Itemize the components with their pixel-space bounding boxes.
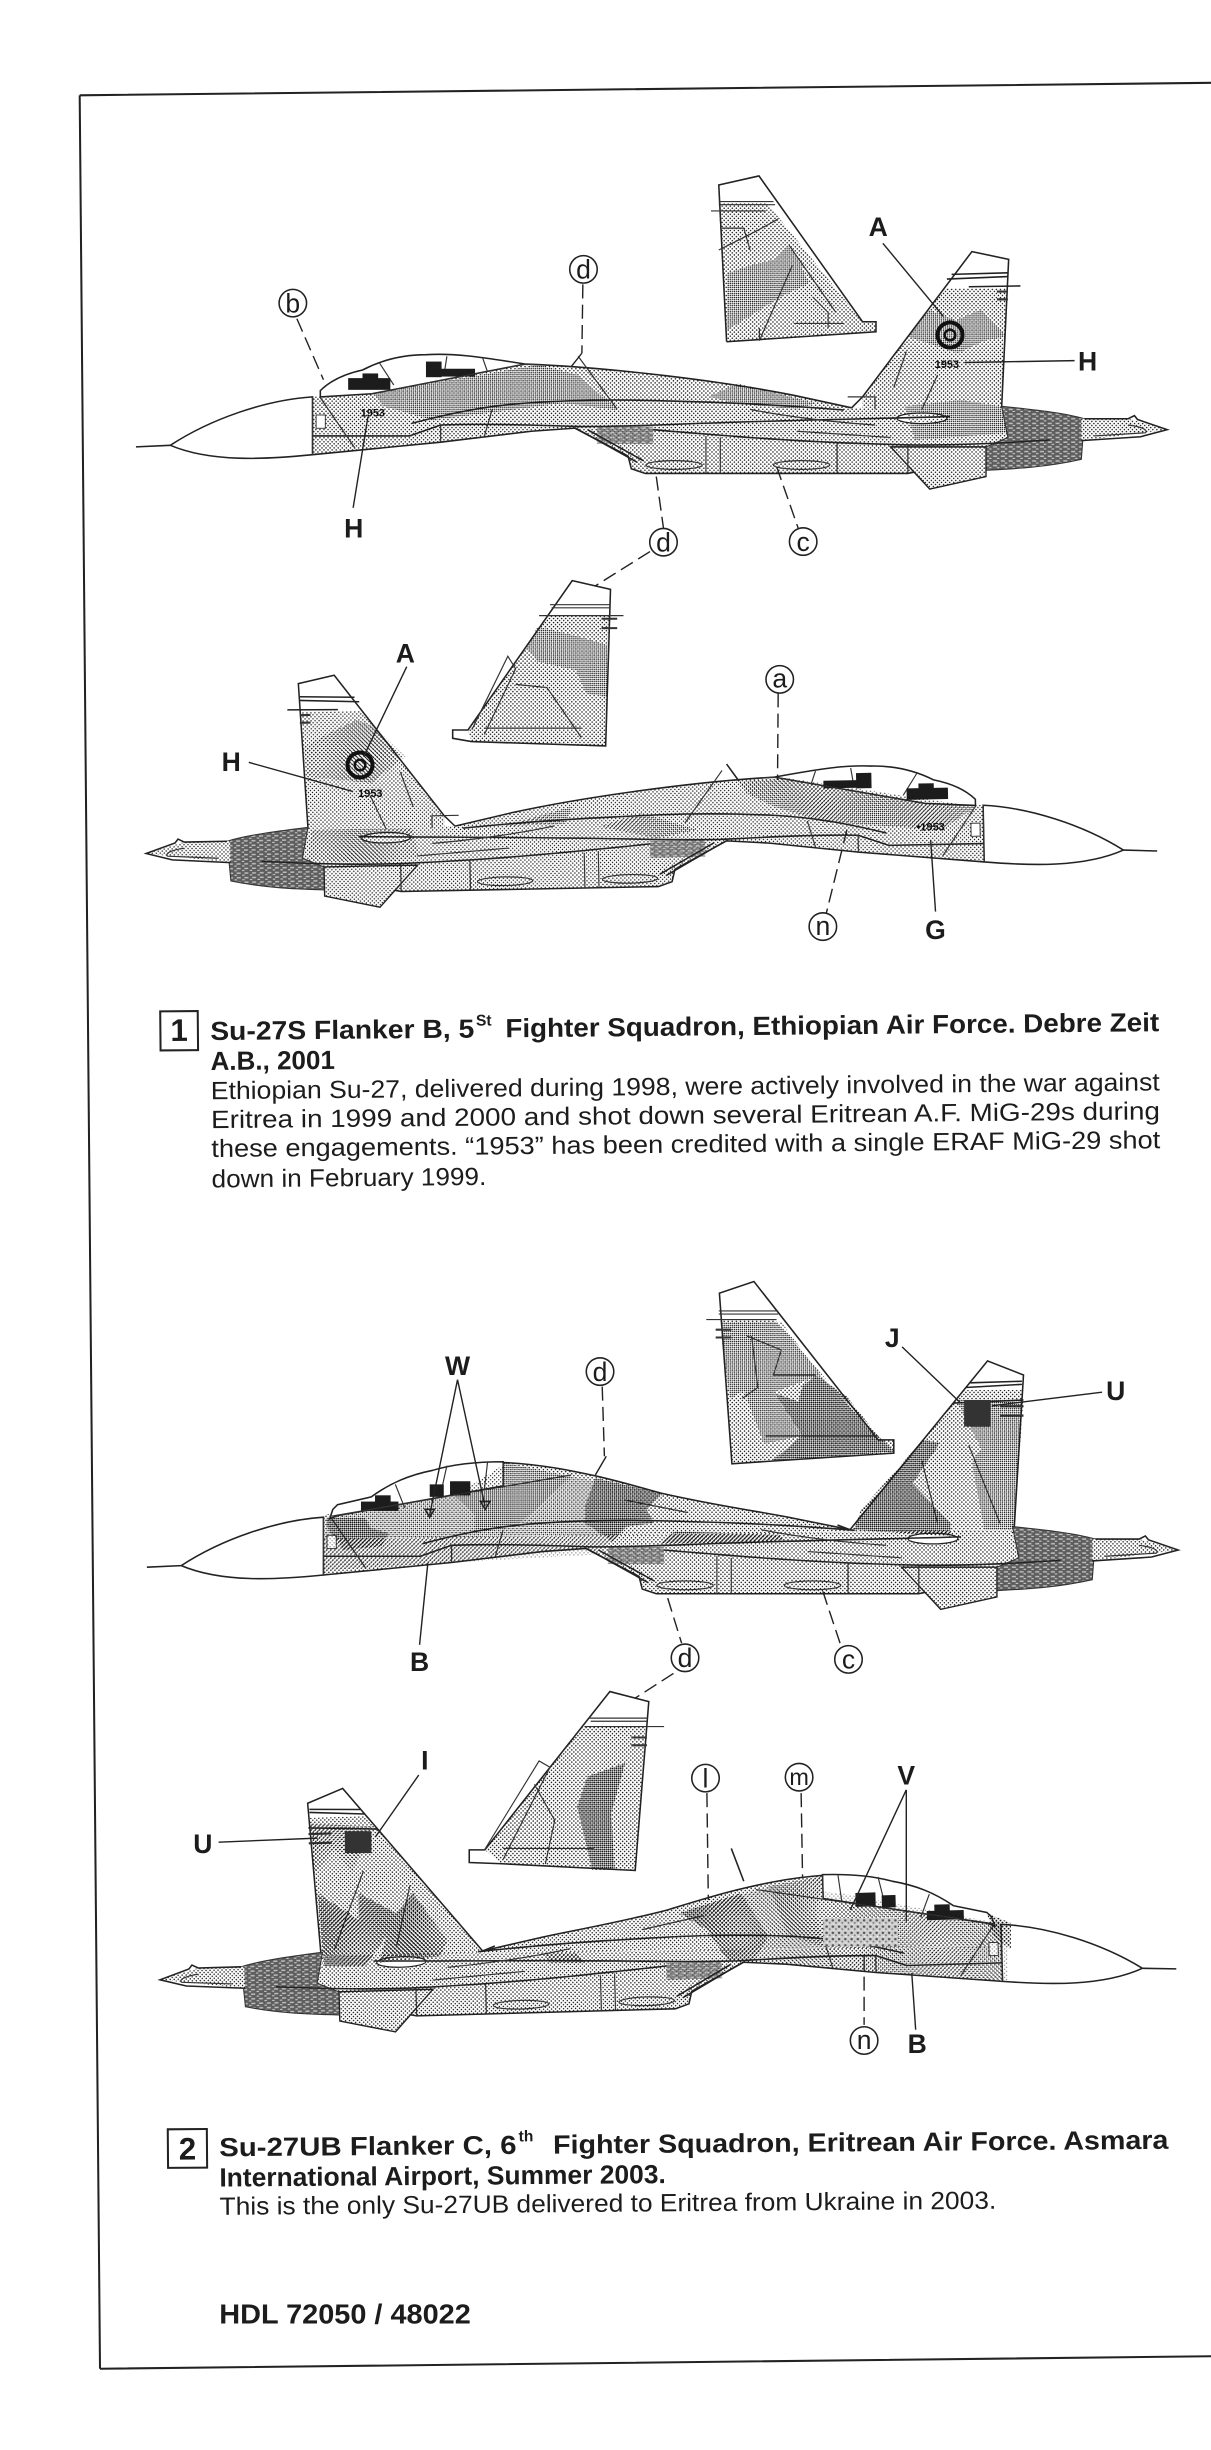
fin outline <box>719 176 876 342</box>
callout A fin: A <box>869 212 888 242</box>
callout c <box>823 1591 862 1675</box>
callout A fin <box>869 212 943 317</box>
tail number: 1953 <box>935 359 959 371</box>
fin details <box>706 1311 878 1436</box>
callout J: J <box>885 1323 900 1353</box>
camouflage: fin band <box>304 720 405 783</box>
callout n: n <box>857 2025 871 2055</box>
roundel <box>348 752 373 778</box>
airframe <box>147 1361 1178 1609</box>
fin mid camouflage <box>720 1322 820 1444</box>
callout H nose <box>344 417 368 543</box>
fin inset 1 <box>711 176 876 342</box>
fin outline <box>453 581 611 746</box>
caption 2 title: Fighter Squadron, Eritrean Air Force. Asmara <box>553 2125 1169 2160</box>
caption 1 body: Eritrea in 1999 and 2000 and shot down several Eritrean A.F. MiG-29s during <box>211 1097 1160 1134</box>
camouflage: dark centre <box>680 1893 768 1960</box>
fin inset 4 <box>469 1692 664 1870</box>
fin details <box>484 1718 664 1864</box>
callout b <box>279 289 323 380</box>
callout B: B <box>908 2029 927 2059</box>
callout U right: U <box>1106 1376 1125 1406</box>
fin camouflage <box>527 627 607 697</box>
callout I <box>376 1746 429 1837</box>
camouflage: fin mid <box>311 1823 372 1873</box>
caption 2 title <box>219 2123 1169 2193</box>
caption 1 title: Su-27S Flanker B, 5 <box>210 1014 474 1046</box>
callout U left <box>193 1829 318 1859</box>
airframe <box>136 252 1167 489</box>
roundel <box>938 322 963 348</box>
caption 1 body: Ethiopian Su-27, delivered during 1998, were actively involved in the war against <box>211 1068 1160 1105</box>
aircraft: Su-27S right side view <box>136 252 1167 489</box>
camouflage: spine mid <box>768 1876 823 1946</box>
callout n <box>850 1956 878 2055</box>
fin details <box>472 605 623 738</box>
camouflage: fin dark <box>854 1440 950 1536</box>
callout l <box>692 1764 719 1900</box>
nose number: 1953 <box>361 407 385 419</box>
callout m: m <box>789 1764 809 1790</box>
number box 1 <box>160 1011 198 1050</box>
callout H left view: H <box>222 747 241 777</box>
camouflage: aft fuselage <box>308 828 419 863</box>
fin insignia <box>345 1831 371 1853</box>
fin camouflage <box>727 245 809 330</box>
fin outline <box>719 1282 894 1464</box>
camouflage: overall forward density <box>323 1477 664 1570</box>
callout H left view <box>222 747 353 792</box>
fin outline <box>469 1692 649 1870</box>
caption 1 title <box>210 1006 1160 1076</box>
caption 2 body: This is the only Su-27UB delivered to Eritrea from Ukraine in 2003. <box>220 2187 996 2221</box>
camouflage: dark stripe <box>661 1531 785 1543</box>
caption 1 body: down in February 1999. <box>211 1163 486 1193</box>
camouflage: fin mid <box>956 1400 1023 1530</box>
callout I: I <box>421 1746 429 1776</box>
callout d lower: d <box>678 1643 692 1673</box>
callout B <box>908 1973 927 2059</box>
airframe <box>155 1766 1177 2038</box>
tail number: 1953 <box>358 788 382 800</box>
callout B <box>410 1563 429 1677</box>
callout c: c <box>797 527 810 557</box>
callout A left view: A <box>396 639 415 668</box>
callout d top <box>570 255 597 367</box>
camouflage: nose patch <box>327 1518 388 1550</box>
callout d lower <box>625 1598 699 1705</box>
callout U left: U <box>193 1829 212 1859</box>
camouflage: aft fuselage <box>905 400 1007 440</box>
fin dark camouflage <box>771 1375 894 1462</box>
number box 1: 1 <box>170 1013 188 1048</box>
airframe <box>143 660 1158 912</box>
caption 1 body: these engagements. “1953” has been credited with a single ERAF MiG-29 shot <box>211 1126 1160 1163</box>
callout c <box>777 467 817 557</box>
number box 2 <box>168 2129 207 2168</box>
aircraft: Su-27UB left side view <box>155 1766 1177 2038</box>
aerial <box>727 764 739 781</box>
caption 1 <box>160 1002 1161 1194</box>
callout d top: d <box>576 255 591 285</box>
fin inset 2 <box>453 581 623 746</box>
callout a: a <box>772 664 787 693</box>
callout H fin <box>965 346 1097 376</box>
callout a <box>766 664 793 780</box>
caption 1 title: Fighter Squadron, Ethiopian Air Force. Debre Zeit <box>505 1007 1160 1043</box>
callout B: B <box>410 1647 429 1677</box>
caption 1 title: St <box>476 1013 492 1030</box>
callout n: n <box>815 911 830 941</box>
camouflage: forward fuselage <box>373 365 617 420</box>
callout n <box>809 830 847 941</box>
callout A left view <box>364 639 415 757</box>
camouflage: fin dark zigzag <box>318 1893 447 1966</box>
callout c: c <box>842 1645 855 1675</box>
callout W <box>425 1351 490 1517</box>
camouflage: fin band <box>908 309 1007 353</box>
camouflage: forward fuselage <box>739 778 976 830</box>
fin insignia <box>964 1400 991 1427</box>
fin details <box>711 202 844 341</box>
nose number: •1953 <box>917 821 945 833</box>
callout H nose: H <box>344 514 363 543</box>
camouflage: dark centre <box>585 1478 661 1541</box>
fin inset 3 <box>706 1282 894 1464</box>
camouflage: stripe <box>543 1953 584 1963</box>
camouflage: spine <box>709 383 816 409</box>
callout d lower <box>586 477 677 592</box>
camouflage: overall forward density <box>688 1886 1008 1981</box>
camouflage: nose patch <box>987 1913 1011 1950</box>
callout d upper: d <box>593 1357 607 1387</box>
aerial <box>731 1848 744 1881</box>
aircraft: Su-27S left side view <box>143 660 1158 912</box>
number box 2: 2 <box>179 2132 196 2167</box>
caption 2 <box>168 2121 1169 2221</box>
callout d lower: d <box>656 528 671 558</box>
callout G <box>925 840 946 945</box>
caption 2 title: th <box>519 2128 533 2145</box>
callout d upper <box>586 1357 614 1475</box>
camouflage: dorsal patches <box>503 807 698 838</box>
camouflage: forward mid patch <box>454 1463 571 1533</box>
fin dark camouflage <box>577 1763 625 1870</box>
callout H fin: H <box>1078 346 1097 376</box>
caption 2 title: International Airport, Summer 2003. <box>219 2159 666 2193</box>
callout U right <box>992 1376 1125 1406</box>
callout b: b <box>285 289 300 318</box>
callout W: W <box>445 1351 471 1381</box>
caption 1 title: A.B., 2001 <box>210 1045 335 1076</box>
decal n area <box>823 1918 898 1946</box>
caption 2 title: Su-27UB Flanker C, 6 <box>219 2130 517 2162</box>
callout m <box>785 1763 813 1877</box>
callout V <box>850 1760 915 1921</box>
callout J <box>885 1323 961 1403</box>
product code: HDL 72050 / 48022 <box>219 2299 471 2330</box>
aircraft: Su-27UB right side view <box>147 1361 1178 1609</box>
callout G: G <box>925 915 946 945</box>
callout l: l <box>703 1764 708 1793</box>
caption 1 body <box>211 1068 1161 1193</box>
callout V: V <box>897 1760 915 1790</box>
